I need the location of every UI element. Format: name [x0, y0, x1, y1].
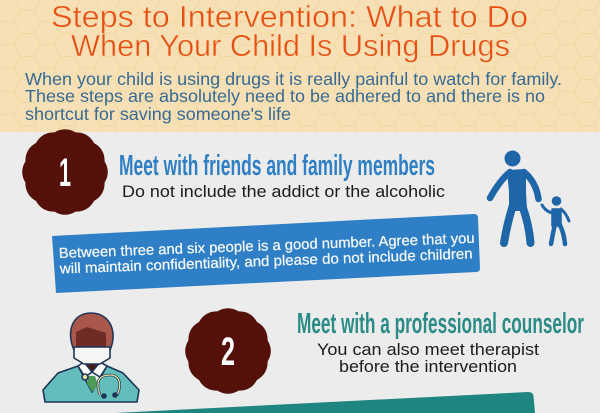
badge: number 2 [185, 308, 271, 394]
step 1 subtext: Do not include the addict or the alcoholic [122, 182, 446, 201]
callout: step 1 detail: will maintain confidentiality, and please do not include children [59, 246, 473, 278]
badge: number 1 [22, 129, 108, 215]
step 2 subtext [317, 340, 539, 376]
panel: header [0, 0, 600, 132]
title: When Your Child Is Using Drugs [71, 28, 510, 63]
intro text [25, 69, 562, 124]
panel: step 1 [22, 129, 569, 293]
icon: doctor with mask [43, 313, 139, 402]
step 2 subtext: You can also meet therapist [317, 340, 539, 359]
intro text: These steps are absolutely need to be adhered to and there is no [25, 86, 545, 106]
callout: step 2 detail box [115, 392, 535, 413]
title [51, 0, 528, 63]
badge: number 1: 1 [59, 151, 71, 195]
callout: step 1 detail [52, 214, 480, 293]
icon: adult and child [490, 150, 569, 244]
panel: step 2 [43, 308, 584, 413]
callout: step 1 detail: Between three and six people is a good number. Agree that you [59, 231, 475, 262]
intro text: When your child is using drugs it is really painful to watch for family. [25, 69, 562, 89]
title: Steps to Intervention: What to Do [51, 0, 528, 34]
badge: number 2: 2 [221, 330, 235, 374]
intro text: shortcut for saving someone's life [25, 104, 291, 124]
step 2 subtext: before the intervention [339, 357, 517, 376]
